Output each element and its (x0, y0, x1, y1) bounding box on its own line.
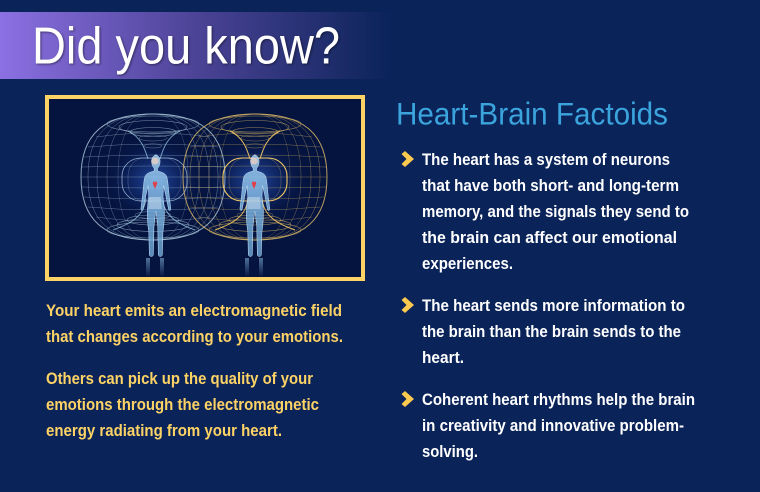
factoid 2 (402, 297, 685, 367)
text block: others pick up emotions: Others can pick up the quality of your (46, 370, 314, 388)
factoid 3: Coherent heart rhythms help the brain (422, 391, 695, 409)
icon: chevron (402, 297, 414, 313)
text block: others pick up emotions: emotions through the electromagnetic (46, 396, 319, 414)
factoid 1: experiences. (422, 255, 513, 273)
factoid 2: The heart sends more information to (422, 297, 685, 315)
panel: electromagnetic field image (47, 97, 363, 279)
left human figure (141, 155, 171, 256)
factoid 1: that have both short- and long-term (422, 177, 679, 195)
factoid 3: in creativity and innovative problem- (422, 417, 684, 435)
factoid 2: heart. (422, 349, 464, 367)
left toroidal field (81, 114, 225, 240)
field glow behind figures (103, 136, 307, 224)
text block: electromagnetic field: Your heart emits an electromagnetic field (46, 302, 342, 320)
factoid 2: the brain than the brain sends to the (422, 323, 681, 341)
factoid 1: The heart has a system of neurons (422, 151, 670, 169)
right human figure (240, 155, 270, 256)
factoid 3 (402, 391, 695, 461)
title banner (0, 12, 392, 79)
factoid 1: memory, and the signals they send to (422, 203, 689, 221)
floor reflections (146, 258, 263, 277)
text block: electromagnetic field (46, 302, 343, 346)
title: Did you know? (32, 18, 340, 76)
factoid 3: solving. (422, 443, 478, 461)
text block: others pick up emotions (46, 370, 319, 440)
icon: chevron (402, 391, 414, 407)
text block: others pick up emotions: energy radiating from your heart. (46, 422, 282, 440)
factoid 1: the brain can affect our emotional (422, 229, 677, 247)
right toroidal field (183, 114, 327, 240)
factoid 1 (402, 151, 689, 273)
text block: electromagnetic field: that changes according to your emotions. (46, 328, 343, 346)
icon: chevron (402, 151, 414, 167)
heading: Heart-Brain Factoids (396, 96, 668, 132)
